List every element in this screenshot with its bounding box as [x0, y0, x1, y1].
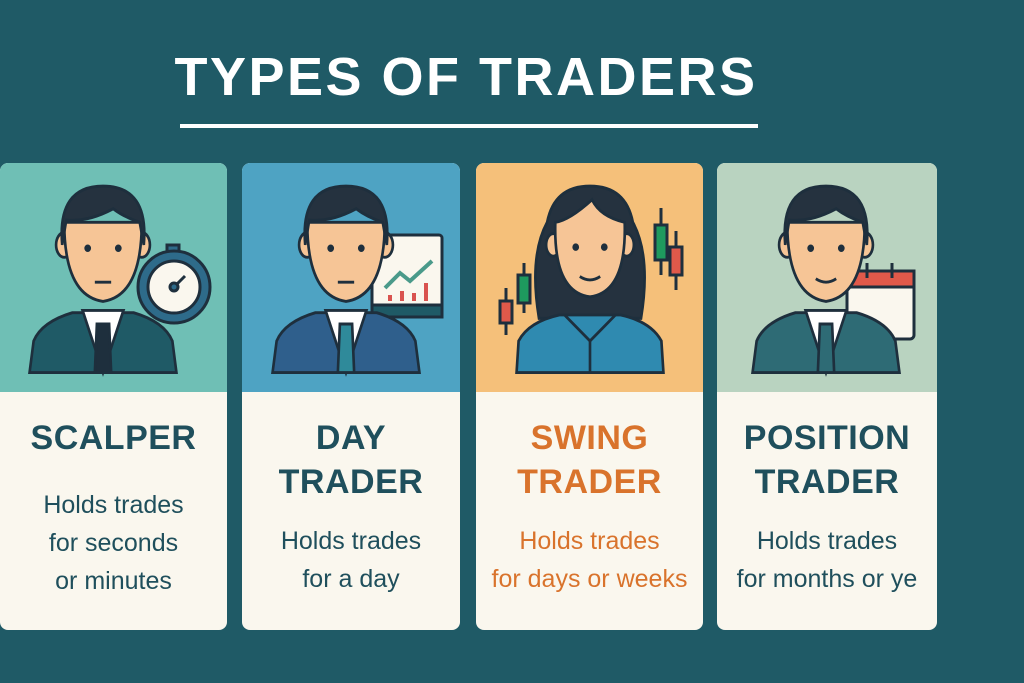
icon: person [30, 186, 176, 373]
panel: position trader: TRADER [755, 463, 899, 501]
panel: position trader: POSITION [744, 419, 910, 457]
panel: swing trader: Holds trades [519, 527, 660, 555]
icon: woman [517, 186, 663, 373]
icon: chart monitor [372, 235, 442, 317]
panel: swing trader: TRADER [517, 463, 662, 501]
panel: swing trader: SWING [531, 419, 648, 457]
icon: candlesticks [500, 208, 682, 335]
panel: position trader [717, 163, 937, 630]
panel: day trader: DAY [316, 419, 386, 457]
panel: scalper [0, 163, 227, 630]
icon: stopwatch [138, 245, 210, 323]
icon: person [273, 186, 419, 373]
panel: scalper: or minutes [55, 567, 172, 595]
panel: position trader: for months or ye [737, 565, 917, 593]
panel: swing trader: for days or weeks [492, 565, 687, 593]
panel: scalper: SCALPER [31, 419, 196, 457]
panel: day trader: TRADER [279, 463, 423, 501]
icon: person [753, 186, 899, 373]
icon: calendar [847, 263, 914, 339]
panel: scalper: Holds trades [43, 491, 184, 519]
title: TYPES OF TRADERS [174, 47, 758, 107]
panel: day trader: for a day [302, 565, 400, 593]
panel: day trader [242, 163, 460, 630]
panel: scalper: for seconds [49, 529, 178, 557]
panel: day trader: Holds trades [281, 527, 421, 555]
panel: swing trader [476, 163, 703, 630]
panel: position trader: Holds trades [757, 527, 897, 555]
